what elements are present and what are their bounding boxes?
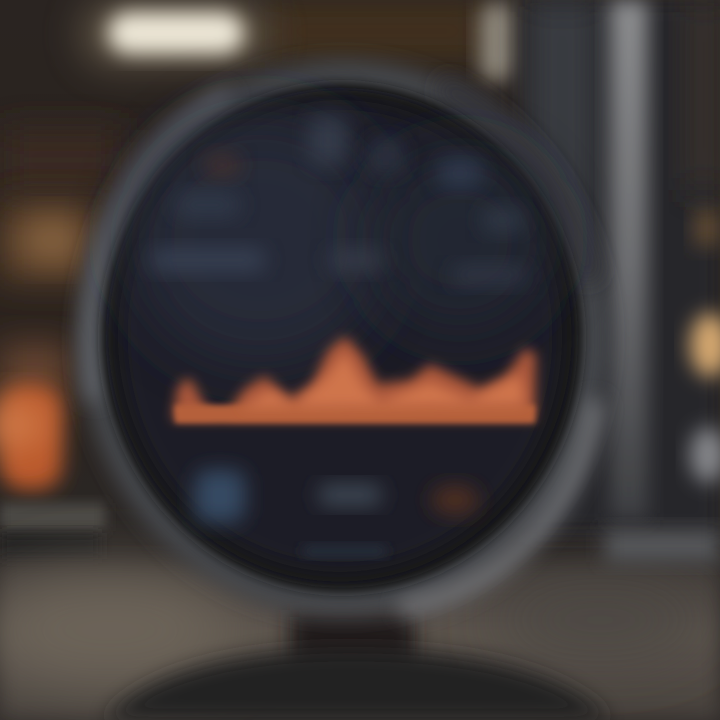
gauge: outer ring [79,60,607,616]
gauge: dark face [102,84,582,592]
floor: table surface [0,530,720,720]
gauge: lower readouts [195,470,479,557]
lights: right side bokeh [690,210,720,483]
light: warm amber left [22,220,82,260]
light: orange glow left [0,385,62,490]
light: ceiling lamp [80,0,270,68]
base: dark stand under gauge [105,610,610,720]
ledge: left grey [0,503,105,559]
chart: orange line graph [172,336,536,423]
gauge: blurred dial markings [150,115,527,286]
light: small glow top right [480,2,514,82]
pillar: right vertical metal [525,0,720,535]
